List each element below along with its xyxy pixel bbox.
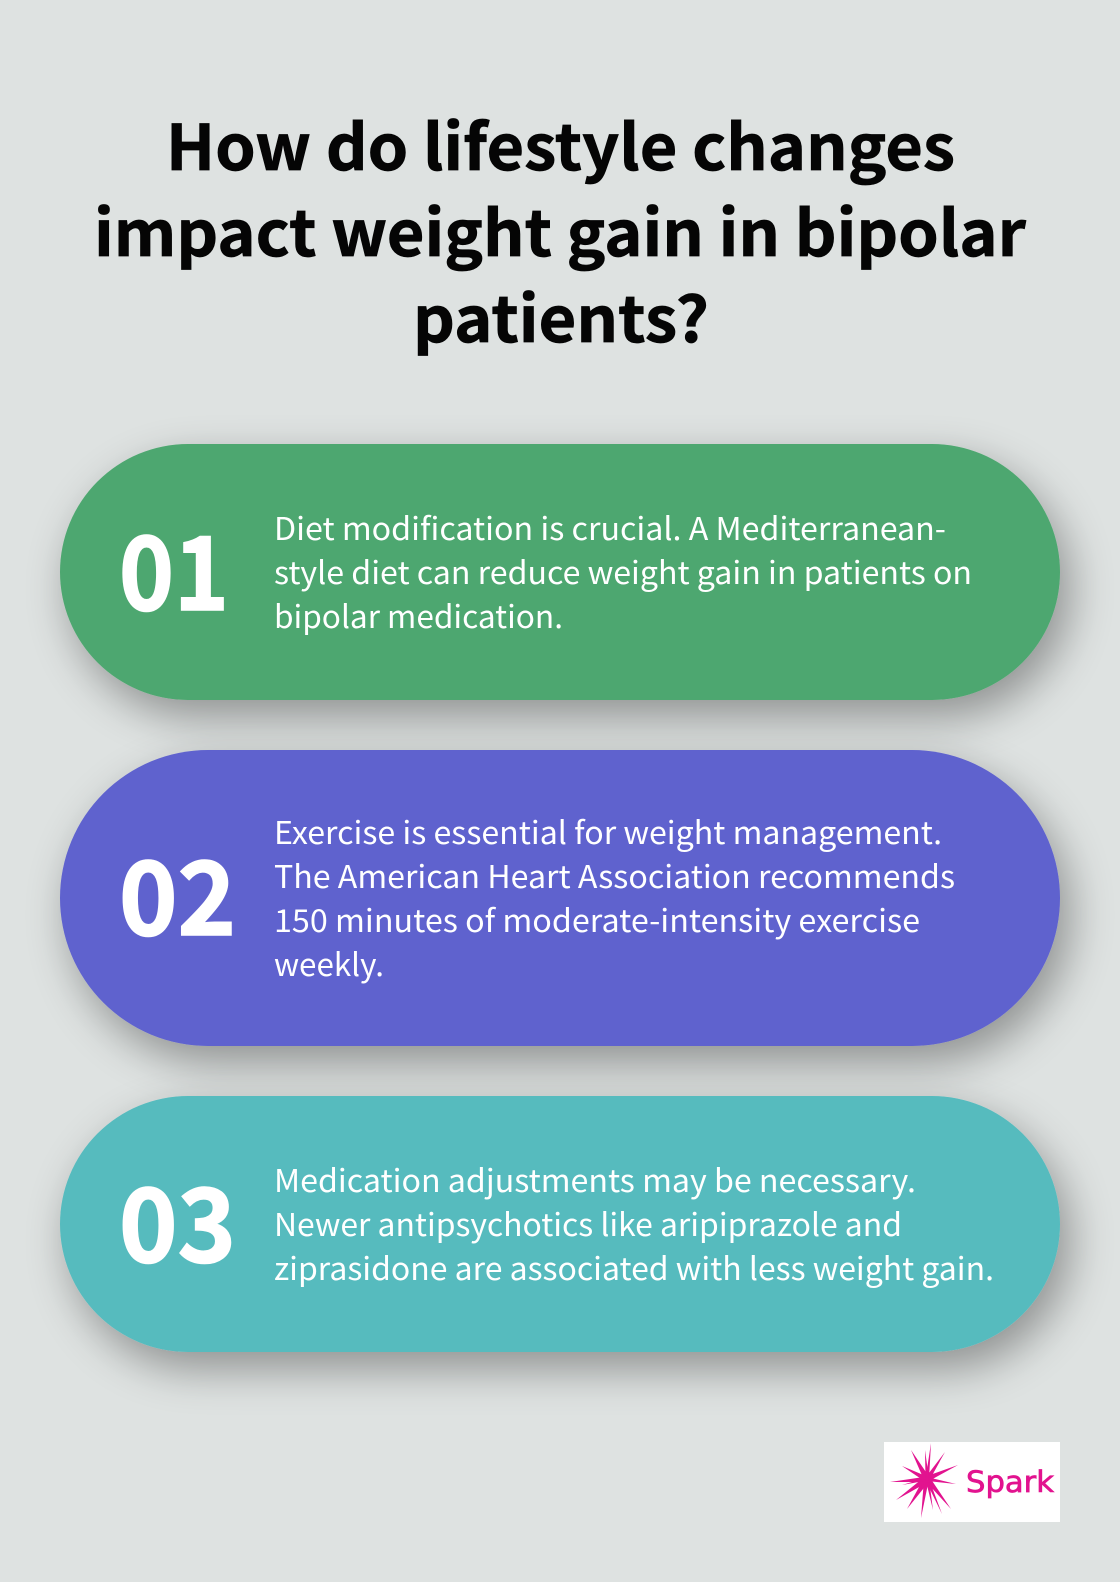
text: diet modification [274,504,972,638]
text: diet modification: Diet modification is crucial. A Mediterranean- [274,504,946,550]
text: medication adjustments: Newer antipsychotics like aripiprazole and [274,1200,902,1246]
panel: 03 medication adjustments [60,1096,1060,1352]
panel: 01 diet modification [60,444,1060,700]
green pill background [60,444,1060,700]
text: medication adjustments: ziprasidone are associated with less weight gain. [274,1244,994,1290]
text: exercise: 150 minutes of moderate-intensity exercise [274,896,920,942]
purple pill background [60,750,1060,1046]
number 02: 02 [119,818,236,965]
title [94,98,1027,361]
text: medication adjustments: Medication adjustments may be necessary. [274,1156,916,1202]
text: exercise [274,808,955,986]
title: How do lifestyle changes [166,98,955,189]
text: medication adjustments [274,1156,994,1290]
teal pill background [60,1096,1060,1352]
text: diet modification: style diet can reduce weight gain in patients on [274,548,972,594]
title: impact weight gain in bipolar [94,184,1027,275]
text: diet modification: bipolar medication. [274,592,563,638]
text: exercise: The American Heart Association recommends [274,852,955,898]
number 03: 03 [119,1145,236,1292]
icon: spark starburst [890,1443,958,1518]
logo: Spark [884,1442,1060,1522]
title: patients? [413,270,709,361]
text: exercise: Exercise is essential for weight management. [274,808,942,854]
panel: 02 exercise [60,750,1060,1046]
number 01: 01 [119,493,229,640]
text: exercise: weekly. [274,940,384,986]
logo wordmark: Spark [966,1465,1054,1499]
